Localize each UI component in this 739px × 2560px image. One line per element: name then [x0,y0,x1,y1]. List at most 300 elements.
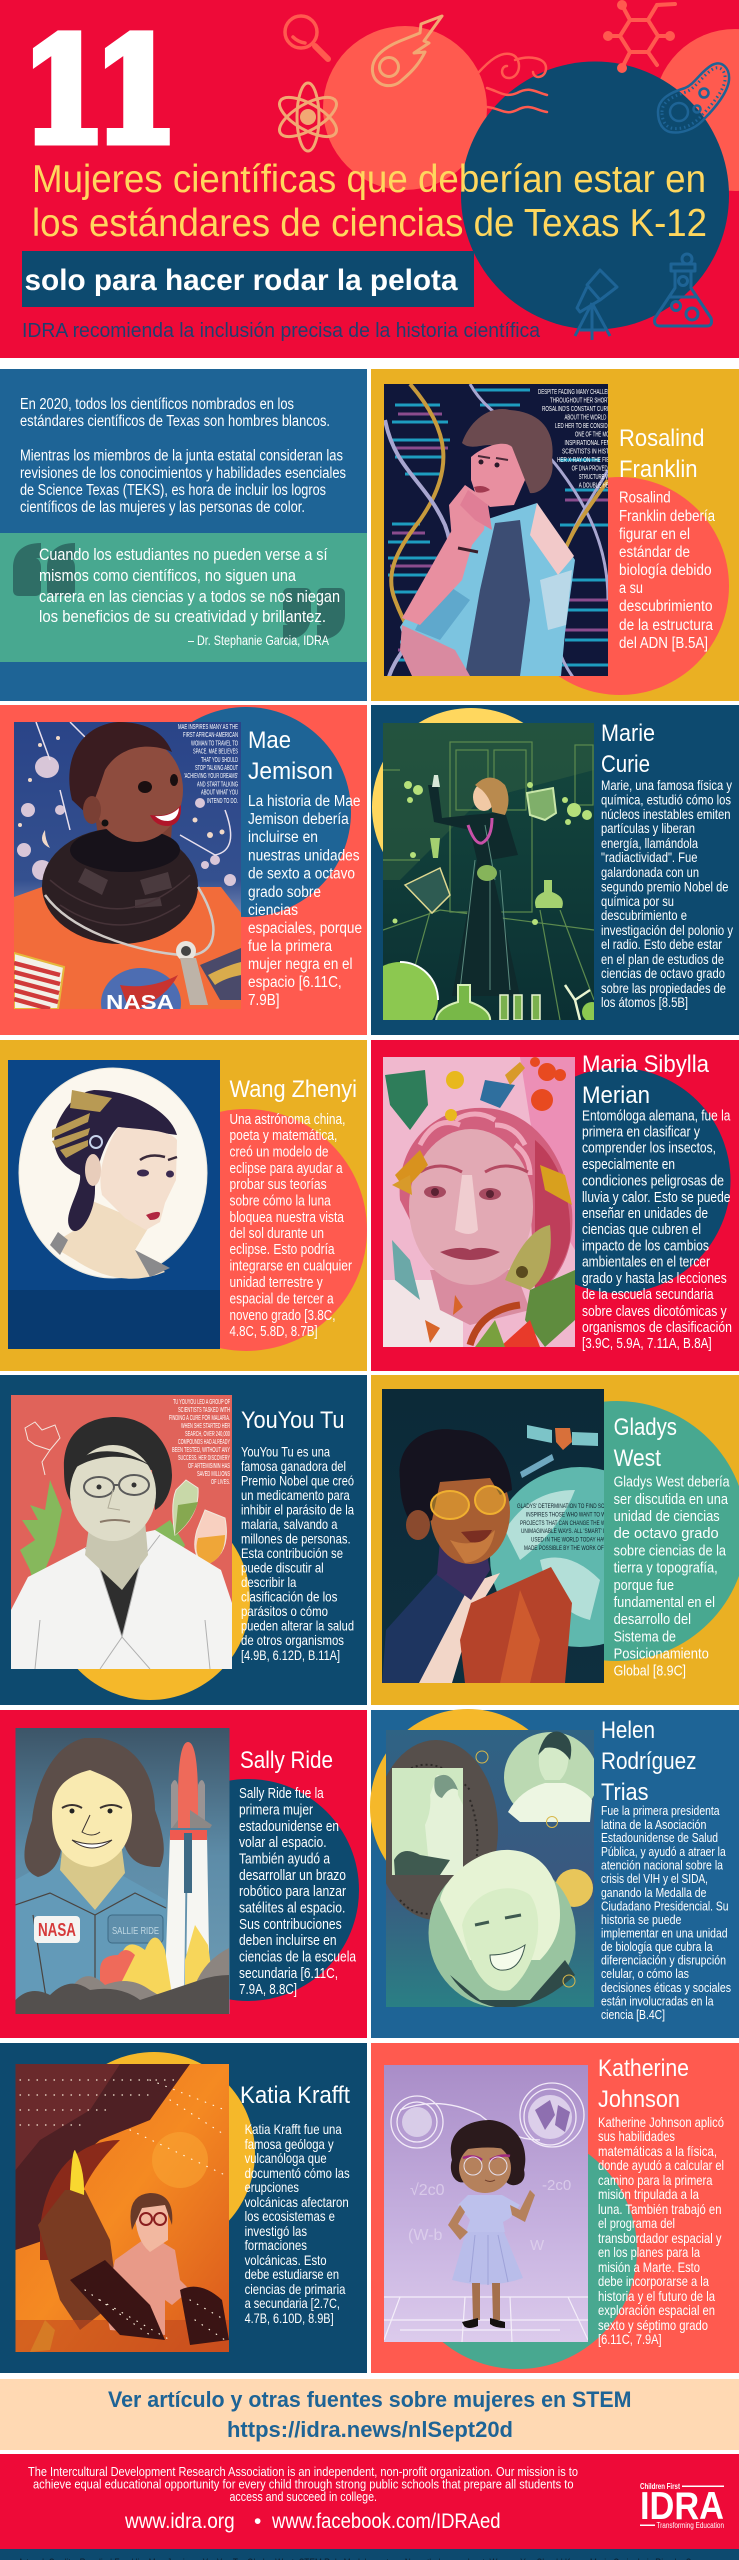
description: estadounidense en [239,1819,339,1835]
poster caption: SUCCESS. HER DISCOVERY [178,1455,230,1462]
title: Mujeres científicas que deberían estar en [32,158,706,201]
description: de otros organismos [241,1633,344,1648]
description: biología debido [619,562,712,579]
description: famosa geóloga y [245,2137,334,2152]
description: figurar en el [619,526,690,543]
panel: Gladys West [371,1375,739,1705]
description: fundamental en el [614,1595,715,1611]
description: Rosalind [619,490,671,507]
poster caption: FIRST AFRICAN-AMERICAN [183,732,238,739]
poster caption [169,1399,230,1486]
description [614,1475,730,1680]
poster caption: INSPIRES THOSE WHO WANT TO WORK ON [526,1511,624,1518]
web links: www.facebook.com/IDRAed [271,2510,500,2533]
description: enseñar en unidades de [582,1206,708,1222]
IDRA logo: Children First [640,2482,680,2491]
hair ornament [52,1090,112,1158]
description: deben incluirse en [239,1933,336,1949]
poster caption: THROUGHOUT HER SHORT LIFE, [550,398,622,404]
icon: swirls and waves [478,54,547,112]
poster caption: USED IN THE WORLD TODAY HAVE BEEN [531,1537,623,1544]
description [601,1804,731,2022]
decorative circles [323,26,739,330]
big portrait [428,1858,576,2008]
description: 7.9B] [248,992,280,1009]
poster caption [538,389,608,488]
name [601,720,655,778]
panel: Mae Jemison [0,705,367,1038]
description: los ecosistemas e [245,2209,335,2224]
description: bloquea nuestra vista [230,1210,345,1226]
description: puede discutir al [241,1561,324,1576]
chalkboard formulas: (W-b [408,2227,442,2244]
description: noveno grado [3.8C, [230,1308,336,1324]
IDRA logo: IDRA [640,2485,724,2528]
description: crisis del VIH y el SIDA, [601,1872,708,1886]
description: unidad terrestre y [230,1275,323,1291]
description: historia se puede [601,1913,681,1927]
intro text: estándares científicos de Texas son hombres blancos. [20,413,330,430]
name tag [108,1915,163,1943]
description: clasificación de los [241,1590,338,1605]
mission statement: The Intercultural Development Research Association is an independent, non-profit organization. Our mission is to [28,2464,578,2479]
title [32,158,707,245]
description: eclipse para ayudar a [230,1161,343,1177]
description: del ADN [B.5A] [619,635,708,652]
name [619,425,704,483]
NASA patch [34,1916,80,1943]
mission statement: access and succeed in college. [230,2489,377,2504]
name: Katherine [598,2055,689,2082]
description: volar al espacio. [239,1835,327,1851]
name: Marie [601,720,655,747]
description [241,1445,354,1663]
description: Una astrónoma china, [230,1112,345,1128]
description: formaciones [245,2238,307,2253]
quote band [0,533,367,662]
description: sobre ciencias de la [614,1544,727,1560]
description: 7.9A, 8.8C] [239,1982,297,1998]
description: a secundaria [2.7C, [245,2296,340,2311]
intro text [20,396,346,516]
intro text: revisiones de los conocimientos y habilidades esenciales [20,465,346,482]
description: Sistema de [614,1630,676,1646]
description: un medicamento para [241,1488,350,1503]
name: Wang Zhenyi [230,1076,357,1103]
description: [6.11C, 7.9A] [598,2332,662,2347]
description: debe incorporarse a la [598,2274,709,2289]
poster caption: INSPIRATIONAL FEMALE [564,440,620,447]
suit [14,887,241,1009]
description: energía, llamándola [601,836,698,851]
hair [451,2120,525,2185]
panel: Wang Zhenyi [0,1040,367,1371]
name: Sally Ride [240,1747,333,1774]
description: a su [619,580,643,597]
flasks [173,1480,198,1535]
quote text [39,546,340,648]
description: documentó cómo las [245,2166,350,2181]
description: ciencias de primaria [245,2282,346,2297]
poster caption: A DOUBLE HELIX. [579,482,617,490]
quote text: los beneficios de su creatividad y brillantez. [39,608,326,626]
description [598,2115,724,2347]
flasks [383,962,438,1020]
poster caption: GLADYS' DETERMINATION TO FIND SOLUTIONS [517,1503,625,1510]
description [239,1786,357,1998]
description: describir la [241,1575,297,1590]
intro text: Mientras los miembros de la junta estatal consideran las [20,448,343,465]
description [582,1109,732,1352]
poster caption: 'ACHIEVING YOUR DREAMS' [184,773,238,780]
quote text: Cuando los estudiantes no pueden verse a sí [39,546,328,564]
description: ciencias [248,902,298,919]
neck and shoulders [62,1202,165,1279]
description: sus habilidades [598,2129,675,2144]
volcano [38,2190,118,2330]
poster caption: STRUCTURE WAS [579,474,615,481]
poster caption: SPACE. MAE BELIEVES [193,748,238,756]
description: millones de personas. [241,1532,351,1547]
panel: footer [0,2454,739,2549]
description: historia y el futuro de la [598,2289,715,2304]
description: en los planes para la [598,2245,700,2260]
flames and smoke [100,1938,175,2014]
head [473,786,492,811]
name: Jemison [248,758,333,785]
name [601,1717,696,1806]
name: Trias [601,1779,648,1806]
poster caption [178,724,238,805]
portrait: Wang Zhenyi [8,1060,220,1349]
description: de la escuela secundaria [582,1287,714,1303]
icon: magnifying glass [285,16,328,59]
name: Mae [248,727,291,754]
coat [11,1530,232,1669]
description: Franklin debería [619,508,715,525]
poster caption: STOP TALKING ABOUT [195,765,238,772]
portrait: Katia Krafft [16,2064,229,2352]
figure [428,785,520,996]
photo circle [504,1732,598,1822]
hair [462,409,553,493]
panel: Maria Sibylla Merian [371,1040,739,1371]
name [582,1051,710,1109]
hair [54,1090,177,1231]
description: También ayudó a [239,1852,331,1868]
description: latina de la Asociación [601,1818,706,1832]
jacket [382,1570,480,1683]
flight suit [15,1857,170,2014]
name: Katia Krafft [240,2082,350,2109]
description: nuestras unidades [248,848,360,865]
description: desarrollar un brazo [239,1868,346,1884]
tether [45,887,213,956]
description: primera en clasificar y [582,1125,701,1141]
description: La historia de Mae [248,793,360,810]
yellow cell [555,1869,593,1907]
NASA patch [101,968,181,1009]
icon: telescope [575,270,617,340]
name [598,2055,689,2113]
glasses [431,1486,505,1519]
description: ciencia [B.4C] [601,2008,665,2022]
panel: Sally Ride [0,1710,367,2038]
description: "radiactividad". Fue [601,850,698,865]
description: fue la primera [248,938,332,955]
poster caption: LED HER TO BE CONSIDERED [555,423,620,430]
flag patch [14,953,64,1009]
portrait: Marie Curie [383,723,594,1020]
description: Sus contribuciones [239,1917,342,1933]
name: Maria Sibylla [582,1051,710,1078]
neck [60,1850,125,1910]
orbits [391,2083,584,2148]
description: ciencias que cubren el [582,1222,701,1238]
poster caption: FINDING A CURE FOR MALARIA. [169,1415,230,1422]
satellites [527,1425,598,1446]
description: creó un modelo de [230,1145,328,1161]
description: vulcanóloga que [245,2151,327,2166]
article text: Ver artículo y otras fuentes sobre mujeres en STEM [108,2387,632,2412]
description: sexto y séptimo grado [598,2318,708,2333]
description: del sol durante un [230,1226,324,1242]
article url: https://idra.news/nlSept20d [227,2417,513,2442]
molecule [25,1422,60,1475]
chalkboard formulas: √2c0 [410,2182,445,2199]
description: volcánicas. Esto [245,2253,327,2268]
hair [24,1738,164,1877]
hair [400,1429,512,1530]
intro text: En 2020, todos los científicos nombrados en los [20,396,294,413]
neck ring [42,828,198,944]
chalkboard formulas: W [530,2237,545,2254]
poster caption: DESPITE FACING MANY CHALLENGES [538,389,620,396]
IDRA logo: Transforming Education [656,2521,724,2530]
description: de octavo grado [614,1526,719,1542]
poster caption: BEEN TESTED, WITHOUT ANY [172,1447,230,1454]
poster caption: ROSALIND'S CONSTANT CURIOSITY [542,406,622,413]
poster caption: INTEND TO DO. [207,798,238,805]
description: estándar de [619,544,690,561]
neck [85,1520,148,1590]
sparks [20,2080,225,2340]
description: están involucradas en la [601,1995,714,2009]
description: ganando la Medalla de [601,1886,706,1900]
description: matemáticas a la física, [598,2144,717,2159]
poster caption: HER X-RAY ON THE FIBERS [557,457,619,464]
poster caption: WOMAN TO TRAVEL TO [191,740,238,748]
icon: atom [274,83,342,151]
portrait: Mae Jemison: NASA [106,992,174,1014]
neck [437,1540,490,1600]
description: Global [8.9C] [614,1664,686,1680]
mission statement [28,2464,578,2504]
face [96,746,183,842]
chalkboard formulas [408,2177,571,2254]
web links [124,2510,500,2533]
description: Jemison debería [248,811,349,828]
number 11: 1 [94,7,178,175]
description: el programa del [598,2216,675,2231]
floor [384,2297,588,2342]
name: Merian [582,1082,650,1109]
portrait: Katherine Johnson [384,2065,588,2342]
name: YouYou Tu [241,1407,344,1434]
description: descubrimiento e [601,908,687,923]
name: Rosalind [619,425,704,452]
NASA patch: NASA [38,1920,76,1940]
description: robótico para lanzar [239,1884,346,1900]
face [70,1445,156,1541]
poster caption [517,1503,625,1552]
icon: bacterium [658,63,729,132]
face [409,1129,533,1285]
name: West [614,1445,661,1472]
description: integrarse en cualquier [230,1259,352,1275]
description: probar sus teorías [230,1177,327,1193]
description: poeta y matemática, [230,1128,337,1144]
name: Helen [601,1717,655,1744]
description [619,490,715,652]
portrait: Gladys West [382,1389,670,1683]
description: de sexto a octavo [248,866,355,883]
description: sobre cómo la luna [230,1194,332,1210]
subtitle bar: solo para hacer rodar la pelota [24,264,458,297]
quote text: carrera en las ciencias y a todos se nos niegan [39,588,340,606]
description: química por su [601,894,674,909]
lava glow [152,2132,208,2188]
blouse [400,503,575,676]
poster caption: MAE INSPIRES MANY AS THE [178,724,238,731]
name: Rodríguez [601,1748,696,1775]
description: pueden alterar la salud [241,1619,354,1634]
panel: header [0,0,739,358]
description: mujer negra en el [248,956,352,973]
description: Premio Nobel que creó [241,1474,354,1489]
panel: introduction [0,369,367,701]
description [245,2122,350,2326]
quote text: mismos como científicos, no siguen una [39,567,297,585]
header background [0,0,739,358]
dark cell circle [374,1740,498,1920]
floating elements [392,781,592,925]
description: Katia Krafft fue una [245,2122,342,2137]
web links: • [254,2510,261,2533]
description: especialmente en [582,1157,675,1173]
description: partículas y liberan [601,821,695,836]
name: Curie [601,751,650,778]
portrait: Maria Sibylla Merian [383,1057,575,1347]
name [248,727,333,785]
panel: YouYou Tu [0,1375,367,1705]
poster caption: THAT YOU SHOULD [201,757,238,764]
face [459,2143,511,2193]
name: Franklin [619,456,698,483]
icon: flask [655,254,712,326]
poster caption: OF ARTEMISININ HAS [188,1463,230,1470]
quote marks [13,543,345,640]
chalkboard formulas: -2c0 [542,2177,571,2194]
name [614,1414,677,1472]
description: volcánicas afectaron [245,2195,349,2210]
panel: Katia Krafft [0,2043,367,2373]
description: 4.8C, 5.8D, 8.7B] [230,1324,318,1340]
icon: molecule [605,2,675,71]
description: de la estructura [619,617,713,634]
intro text: de Science Texas (TEKS), es hora de incluir los logros [20,482,326,499]
description: espaciales, porque [248,920,362,937]
panel: Marie Curie [362,705,739,1038]
description: parásitos o cómo [241,1604,328,1619]
description: porque fue [614,1578,674,1594]
description: misión tripulada a la [598,2187,699,2202]
number 11: 1 [22,7,106,175]
poster caption: TU YOUYOU LED A GROUP OF [173,1399,230,1406]
panel: artwork credits [0,2549,739,2560]
poster caption: OF DNA PROVED THE [572,466,618,472]
description: exploración espacial en [598,2303,715,2318]
description: camino para la primera [598,2173,713,2188]
photo rectangle [392,1768,463,1875]
poster caption: AND START TALKING [197,782,238,788]
intro text: científicos de las mujeres y las personas de color. [20,499,305,516]
description: grado sobre [248,884,321,901]
description: Esta contribución se [241,1546,343,1561]
description [230,1112,352,1340]
description: celular, o cómo las [601,1967,689,1981]
description: los átomos [8.5B] [601,995,688,1010]
description: Sally Ride fue la [239,1786,324,1802]
mission statement: achieve equal educational opportunity for every child through strong public schools that prepare all students to [33,2476,574,2492]
description: impacto de los cambios [582,1239,709,1255]
hair [400,1108,572,1295]
dress [458,2195,520,2232]
face [100,1127,177,1230]
description: primera mujer [239,1803,313,1819]
subtitle bar [22,251,474,307]
description: unidad de ciencias [614,1509,720,1525]
earth [490,1467,670,1647]
poster caption: OF LIVES. [211,1479,230,1486]
poster caption: SAVED MILLIONS [197,1471,230,1478]
name: Gladys [614,1414,677,1441]
description: ambientales en el tercer [582,1255,710,1271]
hair [64,1417,172,1510]
poster caption: MADE POSSIBLE BY THE WORK OF GLADYS [524,1545,624,1552]
name tag: SALLIE RIDE [112,1926,159,1937]
web links: www.idra.org [124,2510,235,2533]
quote text: – Dr. Stephanie Garcia, IDRA [188,632,329,648]
description: inhibir el parásito de la [241,1503,354,1518]
poster caption: ABOUT THE WORLD HAS [564,414,617,422]
title: los estándares de ciencias de Texas K-12 [32,202,707,245]
description: satélites al espacio. [239,1901,345,1917]
description: Posicionamiento [614,1647,709,1663]
portrait: YouYou Tu [11,1395,232,1669]
description: 4.7B, 6.10D, 8.9B] [245,2311,334,2326]
description: ciencias de la escuela [239,1950,357,1966]
description: YouYou Tu es una [241,1445,330,1460]
poster caption: ONE OF THE MOST [575,432,615,438]
poster caption: COMPOUNDS HAD ALREADY [178,1439,230,1446]
description: espacial de tercer a [230,1292,334,1308]
description: investigó las [245,2224,307,2239]
poster caption: SCIENTISTS IN HISTORY. [562,448,620,456]
description: descubrimiento [619,598,712,615]
poster caption: SCIENTISTS TASKED WITH [178,1407,230,1414]
poster caption: WHEN SHE STARTED HER [181,1423,230,1430]
